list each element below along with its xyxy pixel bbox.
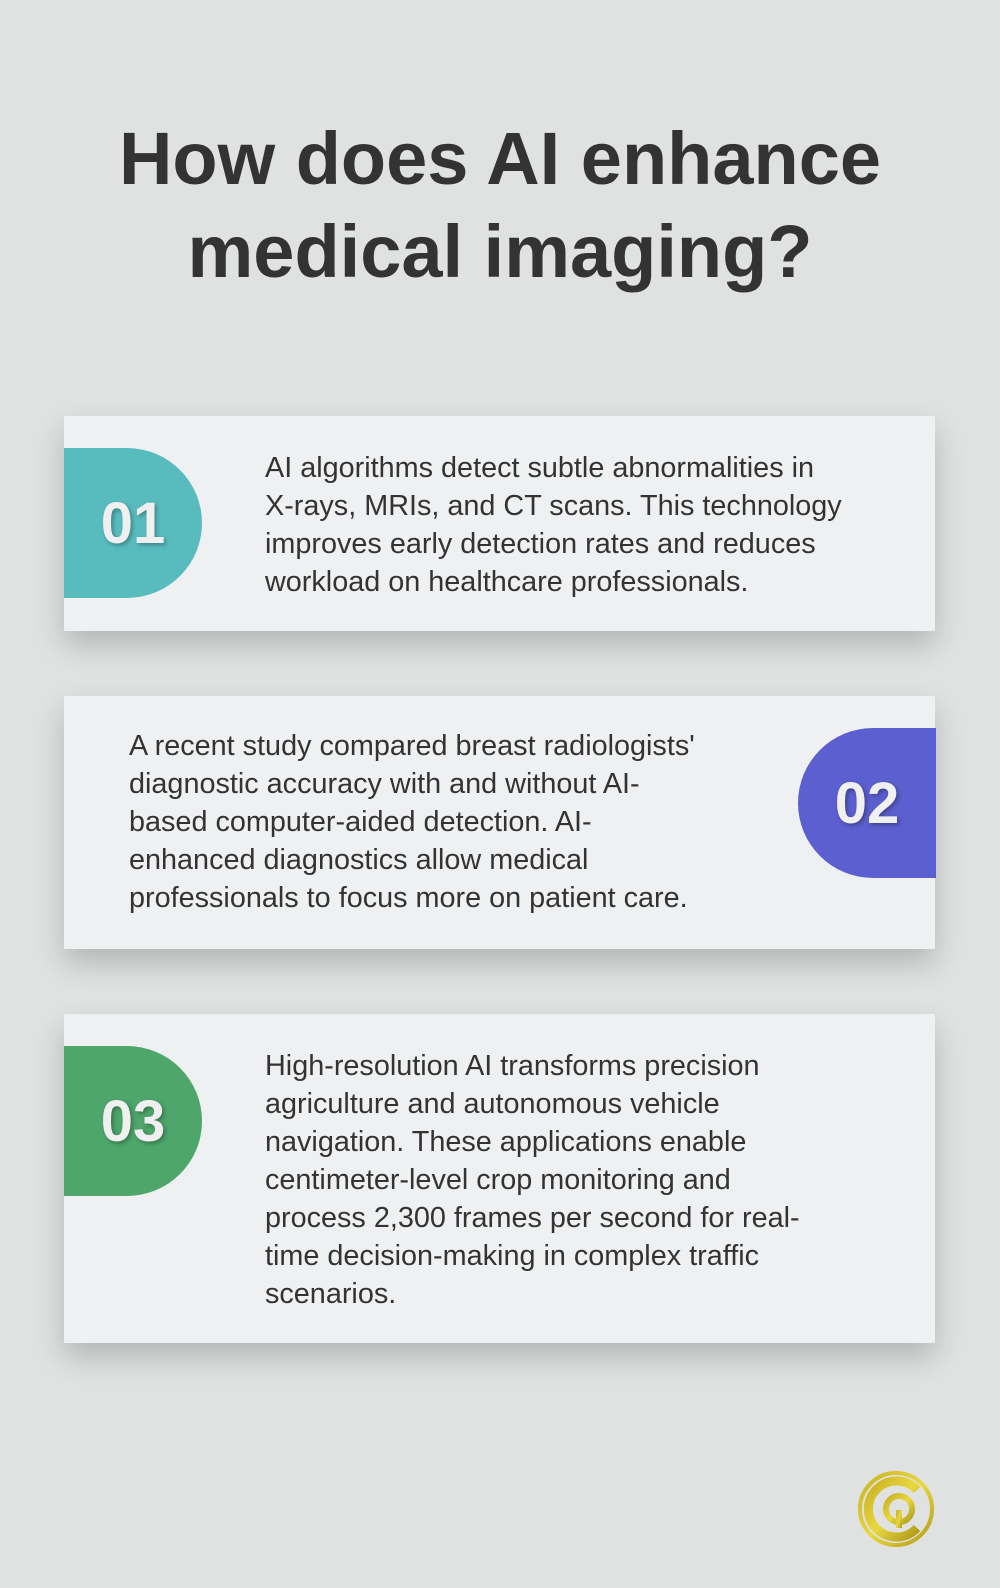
title: How does AI enhance (119, 117, 881, 200)
card 3 (64, 1014, 935, 1343)
text 3: scenarios. (265, 1278, 396, 1310)
badge 03 (64, 1046, 202, 1196)
badge 01 (64, 448, 202, 598)
text 1: X-rays, MRIs, and CT scans. This technology (265, 490, 842, 522)
badge 01: 01 (101, 490, 165, 556)
badge 03: 03 (101, 1088, 165, 1154)
text 3: centimeter-level crop monitoring and (265, 1164, 731, 1196)
card 1 (64, 416, 935, 631)
text 3: High-resolution AI transforms precision (265, 1050, 760, 1082)
text 3 (265, 1050, 800, 1310)
logo (858, 1471, 934, 1547)
text 2 (129, 730, 695, 914)
text 1: improves early detection rates and reduces (265, 528, 816, 560)
text 3: process 2,300 frames per second for real- (265, 1202, 800, 1234)
text 3: time decision-making in complex traffic (265, 1240, 759, 1272)
text 1: AI algorithms detect subtle abnormalities in (265, 452, 814, 484)
title (119, 117, 881, 293)
text 1: workload on healthcare professionals. (265, 566, 748, 598)
text 2: based computer-aided detection. AI- (129, 806, 592, 838)
text 3: navigation. These applications enable (265, 1126, 746, 1158)
text 2: professionals to focus more on patient care. (129, 882, 688, 914)
text 1 (265, 452, 842, 598)
badge 02: 02 (835, 770, 899, 836)
text 2: enhanced diagnostics allow medical (129, 844, 588, 876)
badge 02 (798, 728, 936, 878)
title: medical imaging? (187, 210, 813, 293)
text 2: A recent study compared breast radiologists' (129, 730, 695, 762)
card 2 (64, 696, 935, 949)
text 3: agriculture and autonomous vehicle (265, 1088, 720, 1120)
text 2: diagnostic accuracy with and without AI- (129, 768, 640, 800)
